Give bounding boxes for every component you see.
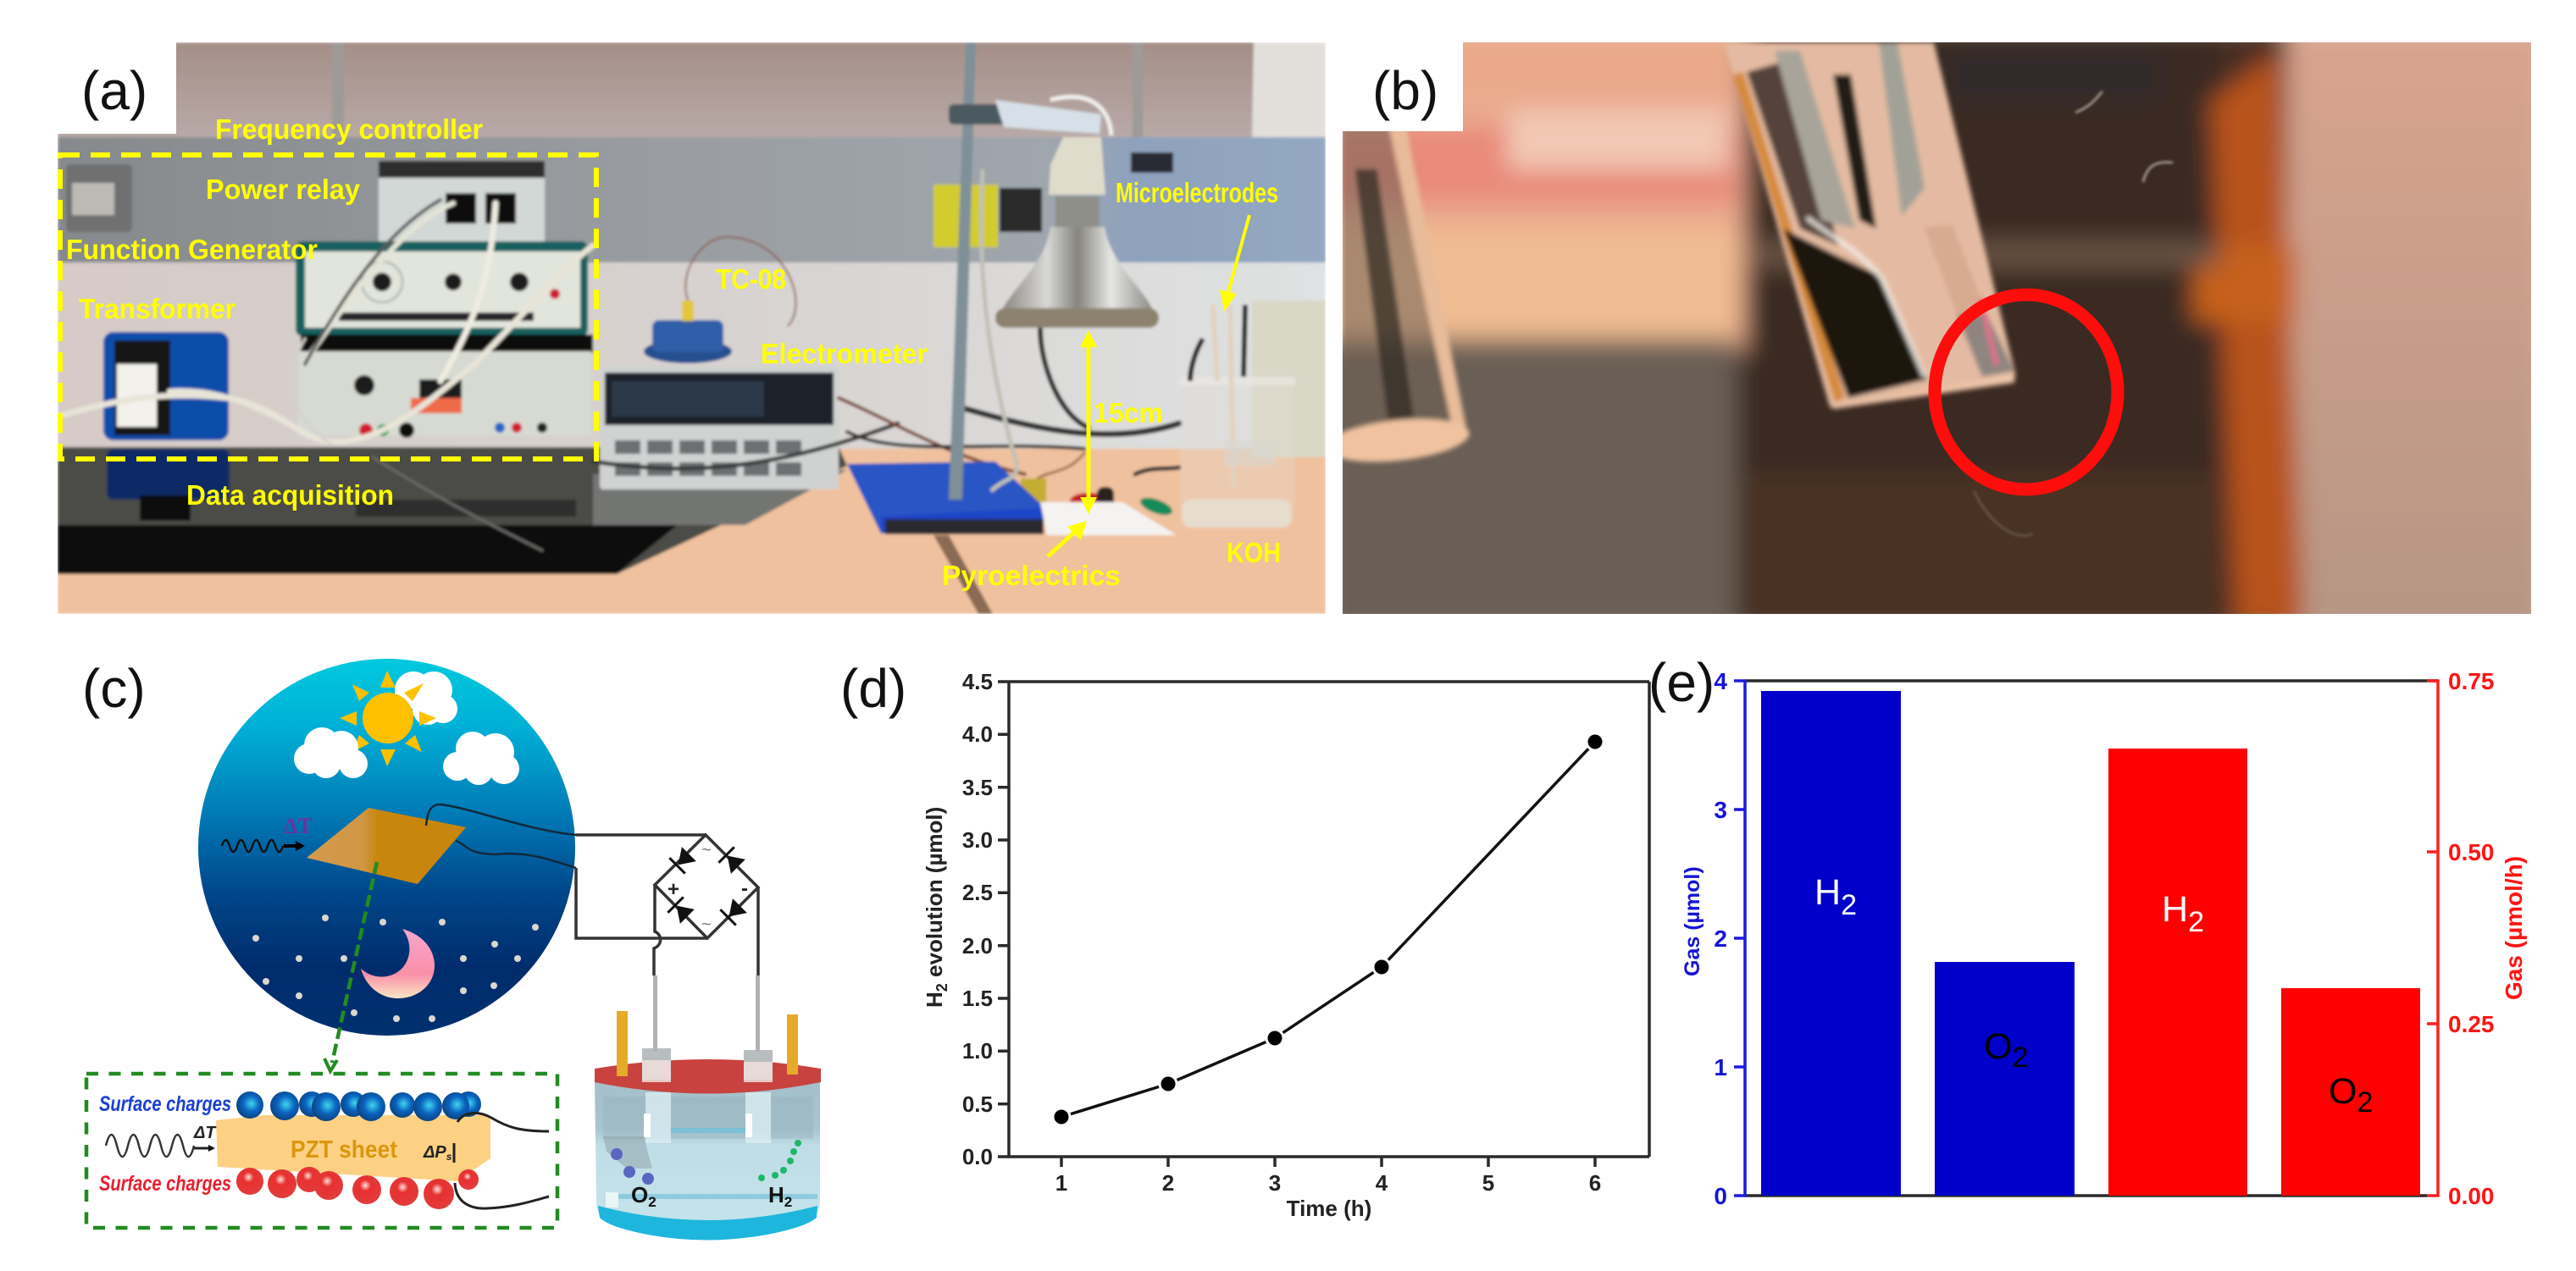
delta T heat wave into plate [222, 840, 305, 852]
black gap between instruments [301, 334, 593, 353]
x tick labels: 6 [1589, 1170, 1601, 1196]
y tick labels: 3.0 [962, 827, 993, 853]
rectifier AC marks [701, 841, 712, 934]
arrow: microelectrodes [1220, 215, 1249, 312]
panel d: H2 evolution line chart [922, 669, 1649, 1221]
background to cover chart d spine [1654, 690, 1738, 1198]
PZT sheet [216, 1115, 490, 1181]
x tick labels: 2 [1162, 1170, 1174, 1196]
delta T small label: ΔT [193, 1124, 217, 1142]
y axis title: H [922, 992, 947, 1008]
stars [252, 915, 539, 1022]
magnetic stirrer base [847, 461, 1044, 533]
O2 label: 2 [648, 1194, 656, 1210]
lamp cable [981, 169, 1017, 491]
sun [340, 671, 436, 766]
crescent moon [361, 929, 435, 998]
panel e: gas bar chart [1654, 668, 2527, 1209]
label: KOH: KOH [1227, 537, 1281, 568]
rectifier polarity marks: + [668, 878, 679, 901]
x tick labels [1055, 1170, 1601, 1196]
bar label H2 white: 2 [1841, 889, 1857, 921]
x tick labels: 4 [1376, 1170, 1388, 1196]
bar: O2 rate [2281, 988, 2420, 1196]
polarisation arrow [452, 1143, 456, 1163]
panel letter (e): (e) [1648, 652, 1715, 713]
hydrogen bubbles [758, 1140, 801, 1181]
small dark sign on trunking [1131, 152, 1173, 173]
label: transformer: Transformer [79, 293, 235, 324]
bar label O2 on red: 2 [2357, 1086, 2373, 1119]
panel a letter background [51, 34, 176, 134]
lamp socket [1049, 137, 1105, 195]
cloud left [294, 727, 368, 778]
clips on desk [1069, 491, 1100, 504]
yellow socket [933, 185, 998, 247]
panel letter (c): (c) [82, 658, 146, 719]
bar: H2 amount [1761, 691, 1901, 1196]
right red axis [2427, 681, 2438, 1196]
centre glass tube [1724, 42, 2015, 409]
panel b letter background [1343, 38, 1463, 131]
delta T label: ΔT [284, 814, 313, 838]
upper wall [58, 42, 1326, 140]
H2 label: 2 [784, 1194, 792, 1210]
heated PZT plate [307, 808, 466, 884]
TC-08 logger [644, 340, 732, 363]
bar: H2 rate [2108, 749, 2247, 1196]
y tick labels: 0.5 [962, 1091, 993, 1117]
green dashed callout box [86, 1074, 557, 1228]
right axis tick labels: 0.00 [2448, 1183, 2494, 1209]
label: microelectrodes: Microelectrodes [1116, 177, 1278, 208]
y axis title: 2 [933, 983, 950, 992]
bar: O2 amount [1935, 962, 2075, 1196]
y tick labels: 2.5 [962, 880, 993, 905]
panel a: lab setup photo [58, 42, 1326, 614]
electrometer [600, 366, 839, 489]
gold posts [617, 1011, 798, 1076]
left axis tick labels: 2 [1714, 926, 1727, 952]
right axis tick labels: 0.75 [2448, 668, 2494, 694]
right equipment box [1252, 301, 1326, 457]
x axis title: Time (h) [1287, 1196, 1371, 1221]
left axis tick labels: 0 [1714, 1183, 1727, 1209]
data line [1061, 742, 1595, 1117]
y tick labels: 0.0 [962, 1144, 993, 1169]
label: pyroelectrics: Pyroelectrics [942, 560, 1121, 591]
y tick labels: 4.0 [962, 721, 993, 747]
surface charges: red label: Surface charges [99, 1172, 231, 1196]
bright wall at upper right [1252, 42, 1326, 140]
red negative charges [236, 1167, 479, 1209]
bar label H2 on red: H [2162, 889, 2188, 930]
wall socket plate [66, 164, 132, 232]
axes and ticks [998, 682, 1649, 1167]
y axis title: evolution (µmol) [922, 807, 947, 983]
left blue axis [1734, 681, 1745, 1196]
double arrow: 15cm distance [1080, 330, 1097, 514]
bar label H2 on red: 2 [2188, 906, 2204, 938]
callout wires [455, 1114, 549, 1208]
cloud behind sun [395, 671, 457, 725]
O2 label: O [631, 1182, 648, 1207]
electrode rods [653, 975, 760, 1052]
power supply [298, 351, 591, 436]
oxygen bubbles [611, 1148, 654, 1185]
y tick labels: 1.5 [962, 986, 993, 1011]
electrode glass sleeves [645, 1092, 771, 1143]
y tick labels: 2.0 [962, 933, 993, 959]
wires from plate to rectifier [426, 804, 576, 868]
bar label O2 black: 2 [2012, 1042, 2028, 1074]
white pyroelectric sheet [1040, 502, 1177, 535]
bottom water band [598, 1206, 817, 1240]
y tick labels: 4.5 [962, 669, 993, 694]
wall rails [332, 42, 1143, 137]
data markers [1053, 733, 1604, 1125]
transformer [103, 332, 229, 440]
cloud right [443, 732, 519, 785]
green dashed zoom arrow [324, 862, 377, 1071]
cell body with water [595, 1080, 820, 1236]
bar label O2 black: O [1984, 1026, 2012, 1067]
polarisation change label: ΔP [424, 1143, 446, 1162]
right axis tick labels: 0.25 [2448, 1011, 2494, 1037]
H2 label: H [768, 1182, 784, 1207]
electrolysis cell [595, 975, 821, 1240]
arrow: pyroelectrics [1048, 521, 1087, 556]
desk [58, 449, 1326, 614]
left glass tube [1324, 127, 1471, 468]
label: frequency controller: Frequency controller [215, 113, 483, 145]
right axis tick labels: 0.50 [2448, 839, 2494, 865]
label: 15cm: 15cm [1094, 397, 1163, 428]
laptop [58, 447, 847, 574]
label: TC-08: TC-08 [716, 263, 786, 295]
panel b: microelectrode close-up photo [1321, 25, 2550, 635]
diodes [667, 846, 748, 926]
lower wall [58, 262, 1326, 461]
label: electrometer: Electrometer [761, 338, 928, 369]
x tick labels: 5 [1482, 1170, 1494, 1196]
x tick labels: 3 [1269, 1170, 1281, 1196]
left axis tick labels: 3 [1714, 797, 1727, 823]
function generator [296, 241, 588, 336]
label: data acquisition: Data acquisition [186, 479, 394, 511]
red circle marking gas bubbles [1935, 295, 2118, 489]
bridge rectifier [576, 835, 758, 975]
beaker [1178, 422, 1294, 525]
blue positive charges [236, 1091, 481, 1121]
lid [595, 1059, 821, 1094]
day/night circle [198, 659, 575, 1036]
bridge rectifier: - [741, 877, 748, 900]
x tick labels: 1 [1055, 1170, 1067, 1196]
top and bottom axis lines [1745, 681, 2438, 1196]
bar label H2 white: H [1814, 872, 1841, 913]
surface charges: blue label: Surface charges [99, 1092, 231, 1116]
rectifier AC marks: ~ [701, 915, 712, 934]
panel letter (a): (a) [81, 60, 147, 121]
PZT sheet label: PZT sheet [291, 1136, 397, 1163]
yellow dashed box [60, 155, 596, 459]
panel letter (d): (d) [840, 658, 906, 719]
streaks in the liquid [1974, 91, 2173, 536]
left axis tick labels [1714, 668, 1727, 1209]
lamp clamp [949, 104, 1008, 124]
panel letter (b): (b) [1372, 60, 1438, 121]
y tick labels: 3.5 [962, 775, 993, 800]
heat wave [106, 1135, 215, 1157]
y tick labels: 1.0 [962, 1038, 993, 1064]
metal trunking [58, 137, 1326, 264]
label: power relay: Power relay [206, 174, 361, 205]
right axis tick labels [2448, 668, 2494, 1209]
label: function generator: Function Generator [66, 234, 318, 265]
cables [58, 200, 1179, 550]
right axis title: Gas (µmol/h) [2501, 856, 2527, 1000]
rectifier AC marks: ~ [701, 841, 712, 859]
left axis tick labels: 4 [1714, 668, 1727, 694]
lamp reflector [1055, 196, 1100, 227]
bar label O2 on red: O [2329, 1071, 2357, 1112]
stand rod [949, 42, 976, 500]
electrode holders [642, 1048, 773, 1082]
left axis tick labels: 1 [1714, 1054, 1727, 1080]
blurred background [1321, 25, 2550, 635]
left axis title: Gas (µmol) [1681, 866, 1704, 976]
y tick labels [962, 669, 993, 1169]
panel c: pyroelectric scheme [86, 659, 821, 1240]
relay box [377, 175, 546, 244]
polarisation change label: s [446, 1151, 452, 1163]
